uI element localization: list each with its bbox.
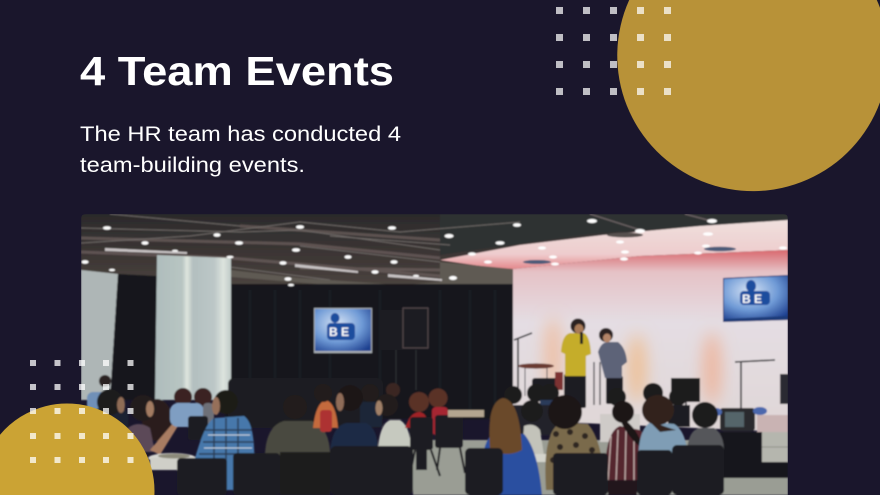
wall light glows: [545, 317, 721, 404]
women in red: [405, 388, 448, 435]
man in white shirt: [376, 394, 411, 448]
man in dark shirt: [96, 388, 128, 428]
pillar: [155, 255, 231, 400]
stage equipment: [514, 333, 788, 412]
man in navy shirt: [330, 385, 378, 452]
left curtain: [110, 274, 157, 400]
left wall: [81, 270, 118, 400]
back row heads: [495, 383, 690, 442]
table right: [448, 410, 484, 417]
audience, left side: [87, 375, 484, 495]
dot grid top right: [556, 7, 671, 95]
two women in background: [170, 388, 214, 440]
man in plaid shirt: [194, 390, 254, 490]
woman in striped top: [605, 401, 652, 484]
woman in grey stripes: [687, 402, 724, 452]
dot grid bottom left: [30, 360, 134, 463]
woman in stripes and white: [522, 399, 547, 463]
pink stage ceiling: [440, 220, 788, 269]
linear light fixtures: [105, 248, 442, 281]
stage wall: [513, 250, 788, 432]
beige ceiling band: [231, 262, 513, 284]
orange woman: [312, 400, 340, 434]
description text: [80, 123, 401, 177]
distant guest in blue: [87, 375, 112, 412]
floor and stage platform: [413, 407, 788, 495]
woman in denim: [638, 395, 688, 465]
woman with long hair: [128, 395, 178, 455]
center screen: [314, 308, 372, 353]
presenter in grey: [598, 328, 627, 404]
back curtain: [225, 284, 515, 419]
speakers: [395, 306, 430, 390]
center screen: B E: [329, 325, 349, 339]
description text: The HR team has conducted 4: [80, 123, 401, 146]
ceiling vents: [523, 232, 736, 264]
ceiling lights: [82, 219, 787, 286]
right screen: B E: [742, 292, 762, 306]
decorative yellow circle bottom left: [0, 403, 154, 495]
small table: [148, 453, 196, 470]
man in grey shirt: [264, 420, 331, 456]
event photo: [81, 214, 788, 495]
title: 4 Team Events: [80, 48, 394, 94]
back audience seats: [228, 378, 383, 428]
presenter in yellow: [561, 318, 591, 408]
black chairs front right: [465, 445, 724, 495]
right screen: [723, 275, 788, 322]
guest group behind: [360, 383, 400, 427]
audience, right side: [465, 383, 724, 495]
black chairs front left: [177, 415, 465, 495]
woman in leopard print: [545, 395, 604, 490]
description text: team-building events.: [80, 154, 305, 177]
ceiling: [81, 214, 788, 285]
decorative yellow circle top right: [617, 0, 880, 191]
blonde woman in blue: [480, 398, 542, 495]
